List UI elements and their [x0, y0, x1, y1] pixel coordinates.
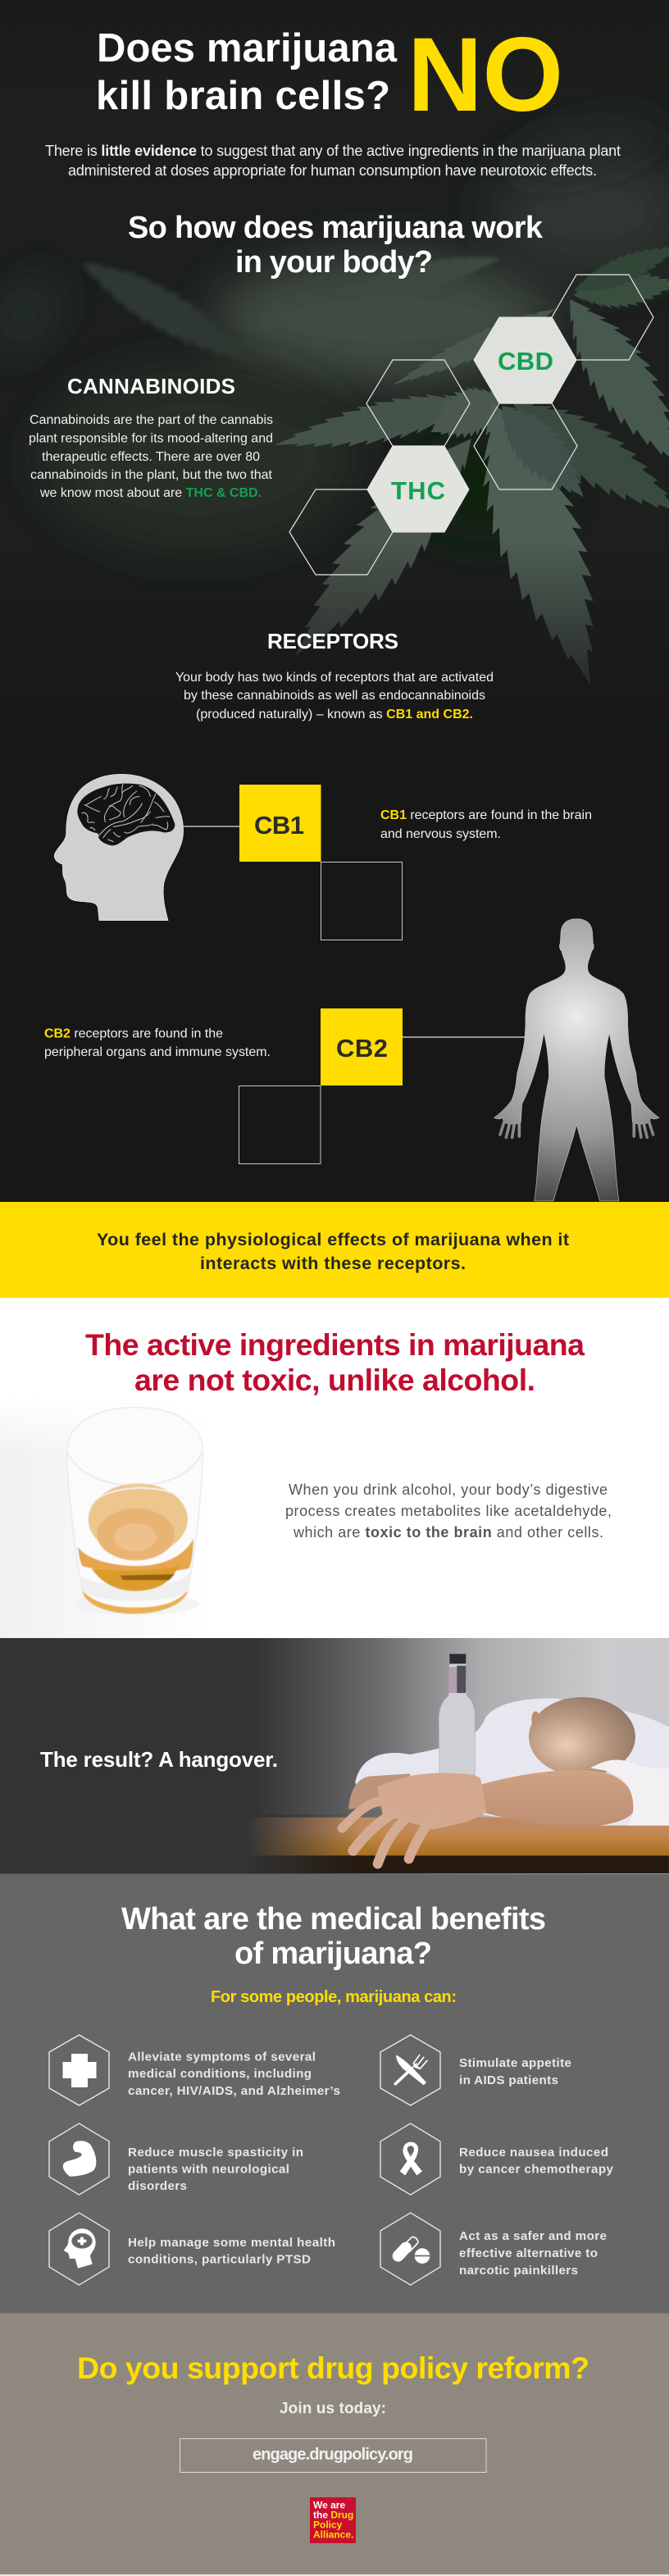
connector: head to CB1 [184, 826, 239, 827]
CB2 description: peripheral organs and immune system. [44, 1045, 271, 1059]
CB1 description [380, 808, 592, 841]
logo: Drug Policy Alliance: We are [313, 2499, 345, 2510]
CBD hexagon [474, 317, 576, 403]
icon: head with plus [49, 2213, 109, 2285]
icon: knife and fork [380, 2035, 440, 2105]
heading [85, 1327, 585, 1397]
benefit: symptoms: Alleviate symptoms of several [128, 2050, 316, 2064]
benefit: symptoms: medical conditions, including [128, 2067, 312, 2081]
logo: Drug Policy Alliance: Policy [313, 2519, 343, 2530]
benefit: painkillers: Act as a safer and more [459, 2229, 607, 2243]
benefit: mental health: Help manage some mental health [128, 2236, 335, 2250]
benefit: muscle: Reduce muscle spasticity in [128, 2146, 303, 2160]
cannabinoids text: plant responsible for its mood-altering and [29, 431, 273, 446]
arm [481, 1770, 635, 1827]
head [529, 1697, 635, 1777]
shirt [355, 1698, 669, 1826]
intro paragraph: administered at doses appropriate for human consumption have neurotoxic effects. [68, 162, 597, 179]
benefit: appetite [380, 2035, 571, 2105]
CB2 description [44, 1026, 271, 1059]
benefit: painkillers [380, 2213, 607, 2285]
panel: yellow callout: You feel the physiological effects of marijuana when it [97, 1230, 569, 1249]
title: Does marijuana [97, 26, 398, 71]
outline hexagon middle [366, 360, 470, 446]
receptors text: by these cannabinoids as well as endocannabinoids [184, 689, 485, 703]
THC hexagon: THC [391, 476, 445, 505]
heading: so how does marijuana work [128, 211, 544, 280]
benefit: nausea: Reduce nausea induced [459, 2146, 608, 2160]
intro paragraph [45, 143, 621, 179]
icon: capsule and tablet [380, 2213, 440, 2285]
left forearm behind [348, 1773, 416, 1809]
THC hexagon [367, 446, 469, 532]
receptors heading: RECEPTORS [267, 629, 398, 653]
cannabinoids text: we know most about are THC & CBD. [39, 486, 262, 500]
benefit: nausea [380, 2123, 614, 2195]
benefit: muscle: patients with neurological [128, 2163, 289, 2176]
table [246, 1814, 669, 1875]
benefit: nausea: by cancer chemotherapy [459, 2163, 614, 2176]
logo: Drug Policy Alliance [310, 2497, 356, 2543]
title answer: NO: NO [407, 16, 563, 134]
heading: Do you support drug policy reform? [77, 2351, 589, 2385]
icon: human body silhouette [494, 919, 659, 1201]
image: man asleep at table with bottle [246, 1654, 669, 1875]
benefit: symptoms [49, 2035, 340, 2105]
benefit: appetite: in AIDS patients [459, 2073, 558, 2087]
outline hexagon lower left [289, 489, 393, 575]
subheading: For some people, marijuana can: [211, 1988, 457, 2006]
receptors text: (produced naturally) – known as CB1 and CB2. [196, 708, 473, 721]
url box: engage.drugpolicy.org [253, 2446, 413, 2464]
cannabinoids text [29, 413, 273, 500]
benefit: muscle [49, 2123, 303, 2195]
panel: hangover [0, 1638, 669, 1875]
alcohol text: When you drink alcohol, your body’s digestive [289, 1481, 608, 1498]
receptors text: Your body has two kinds of receptors that are activated [175, 671, 494, 685]
hangover text: The result? A hangover. [40, 1747, 278, 1772]
hand and fingers [342, 1773, 486, 1864]
CB2 description: CB2 receptors are found in the [44, 1026, 223, 1041]
cannabinoids text: therapeutic effects. There are over 80 [42, 450, 260, 464]
panel: yellow callout [0, 1202, 669, 1298]
benefit: muscle: disorders [128, 2179, 187, 2193]
connector: CB2 to body [403, 1036, 525, 1038]
CB1 box: CB1 [254, 811, 304, 840]
title [96, 26, 398, 118]
cannabinoids text: Cannabinoids are the part of the cannabis [30, 413, 273, 427]
title: kill brain cells? [96, 74, 390, 118]
background photo: blurred and sharp cannabis leaves [0, 0, 669, 726]
cannabinoids text: cannabinoids in the plant, but the two that [30, 468, 273, 482]
panel: medical benefits [0, 1874, 669, 2314]
CB2 box: CB2 [336, 1034, 388, 1063]
CB1 description: and nervous system. [380, 827, 501, 841]
icon: medical cross [49, 2035, 109, 2105]
outline hexagon top right [552, 275, 653, 360]
benefit: painkillers: narcotic painkillers [459, 2264, 578, 2278]
image: whisky glass [67, 1408, 203, 1615]
hexagon cluster: CBD and THC [289, 275, 653, 575]
CB1 description: CB1 receptors are found in the brain [380, 808, 592, 822]
benefit: symptoms: cancer, HIV/AIDS, and Alzheimer’s [128, 2084, 340, 2098]
intro paragraph: There is little evidence to suggest that any of the active ingredients in the marijuana plant [45, 143, 621, 159]
shirt cuff [590, 1760, 669, 1826]
panel: yellow callout: interacts with these receptors. [200, 1254, 466, 1273]
outline hexagon below CBD [474, 403, 577, 489]
bottle [439, 1654, 475, 1775]
panel: receptors diagram [0, 726, 669, 1202]
heading: What are the medical benefits [121, 1902, 546, 1937]
heading: The active ingredients in marijuana [85, 1327, 585, 1362]
brain [77, 784, 175, 845]
alcohol text: which are toxic to the brain and other cells. [293, 1524, 603, 1541]
logo: Drug Policy Alliance: the Drug [313, 2509, 353, 2520]
panel: cannabis plant background with intro [0, 0, 669, 726]
join us text: Join us today: [280, 2401, 386, 2417]
heading: of marijuana? [234, 1937, 432, 1971]
benefit: mental health: conditions, particularly PTSD [128, 2253, 311, 2266]
heading [121, 1902, 546, 1971]
benefit: mental health [49, 2213, 335, 2285]
panel: call to action [0, 2314, 669, 2576]
outline square CB1 [321, 862, 402, 940]
icon: flexed arm [49, 2123, 109, 2195]
cannabinoids heading: CANNABINOIDS [67, 374, 235, 398]
benefit: appetite: Stimulate appetite [459, 2056, 571, 2070]
panel: not toxic unlike alcohol [0, 1298, 669, 1638]
logo: Drug Policy Alliance: Alliance. [313, 2528, 353, 2540]
CBD hexagon: CBD [498, 347, 553, 375]
CB2 box [321, 1008, 403, 1085]
CB1 box [239, 785, 321, 862]
outline square CB2 [239, 1085, 321, 1164]
receptors text [175, 671, 494, 721]
alcohol text [285, 1481, 612, 1541]
url box [180, 2438, 486, 2473]
benefit: painkillers: effective alternative to [459, 2246, 598, 2260]
icon: head with brain [54, 774, 184, 921]
alcohol text: process creates metabolites like acetaldehyde, [285, 1503, 612, 1519]
heading: so how does marijuana work: in your body? [235, 245, 433, 280]
icon: ribbon [380, 2123, 440, 2195]
heading: are not toxic, unlike alcohol. [134, 1363, 535, 1397]
heading: so how does marijuana work: So how does marijuana work [128, 211, 544, 245]
